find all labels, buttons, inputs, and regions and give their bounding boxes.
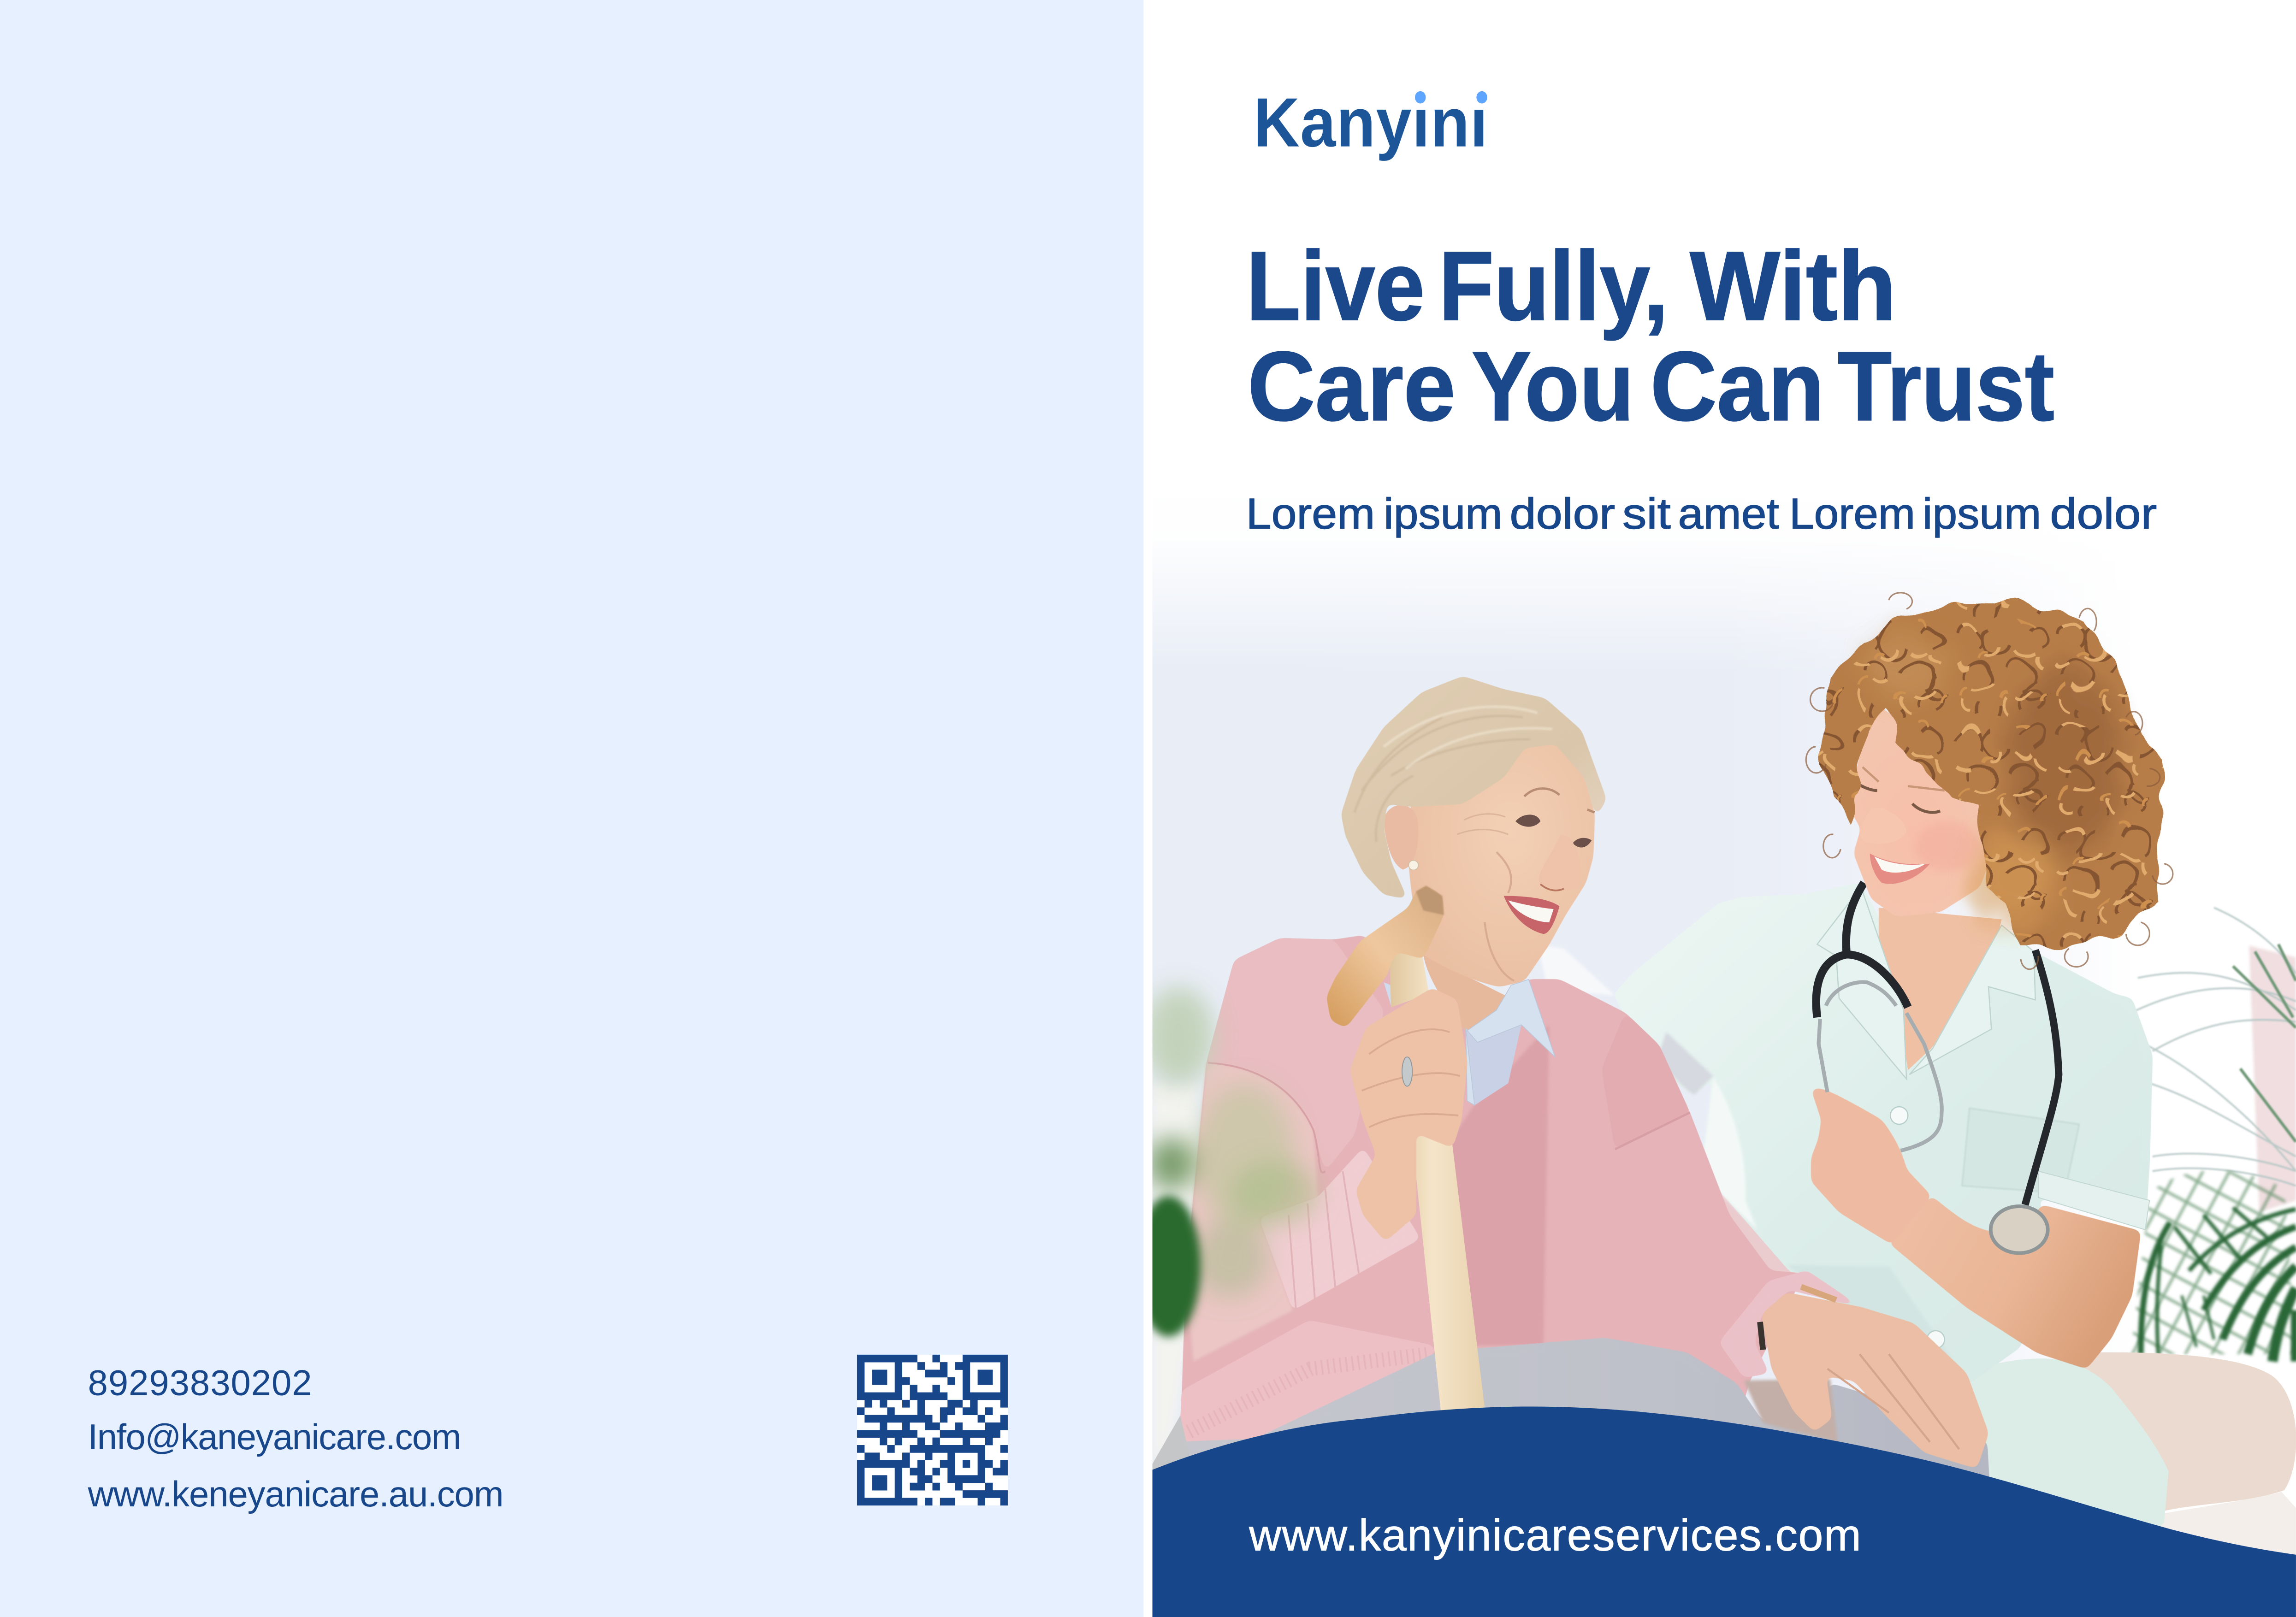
pale top foliage <box>1143 987 1214 1086</box>
heading line 2: Care <box>1248 331 1456 441</box>
photo background wall <box>1153 576 2037 1464</box>
pink shadow beneath sleeve <box>1698 1164 1816 1288</box>
woman face <box>1408 732 1595 987</box>
contact details <box>88 1363 504 1514</box>
black tubing <box>1816 883 1908 1017</box>
nurse face <box>1849 704 1990 916</box>
dark fronds <box>2141 1208 2296 1362</box>
phone number: 89293830202 <box>88 1363 312 1403</box>
woman collar <box>1384 980 1555 1105</box>
nurse uniform <box>1614 883 2153 1383</box>
nurse arm <box>1889 1196 2141 1369</box>
cushion <box>2079 1352 2296 1514</box>
blanket <box>2153 1492 2296 1574</box>
heading line 2 <box>1248 331 2054 441</box>
pocket <box>1962 1108 2079 1193</box>
chest piece <box>1991 1206 2048 1253</box>
subtitle: sit <box>1622 490 1671 538</box>
blurred foreground plant left <box>1136 987 1318 1337</box>
heading line 2: Trust <box>1838 331 2054 441</box>
leafy mesh <box>2130 1170 2296 1354</box>
QR code <box>857 1355 1008 1505</box>
cut end <box>1416 885 1444 915</box>
woman neck <box>1423 955 1508 1042</box>
lower uniform fold <box>1787 1265 1970 1383</box>
heading line 1 <box>1246 231 1896 341</box>
heading line 2: Can <box>1650 331 1824 441</box>
left sleeve <box>1186 1063 1318 1362</box>
palm plant right <box>2130 908 2296 1362</box>
heading line 1: Live <box>1246 231 1425 341</box>
heading line 1: With <box>1690 231 1896 341</box>
nurse eyes, nose and smile <box>1857 767 1980 884</box>
upper sleeve highlight <box>1207 938 1384 1171</box>
dark leaf left <box>1136 1196 1201 1337</box>
body fold <box>1701 1077 1757 1230</box>
woman sweater <box>1178 935 1804 1458</box>
right upper sleeve <box>1602 1013 1690 1149</box>
woman hair <box>1341 676 1606 899</box>
left sofa <box>1153 1083 1196 1464</box>
woman ribbed right cuff <box>1719 1271 1861 1378</box>
left ribbed cuff <box>1259 1148 1420 1310</box>
nurse neck and chest <box>1879 908 2002 1070</box>
subtitle: dolor <box>2050 490 2157 538</box>
finger lines and ring <box>1362 1029 1460 1127</box>
nurse trousers <box>1966 1358 2169 1555</box>
cane shaft <box>1390 951 1485 1411</box>
cane <box>1326 885 1485 1411</box>
main heading <box>1246 231 2054 441</box>
email address: Info@kaneyanicare.com <box>88 1417 461 1457</box>
translucent leaves over sleeve <box>1148 1083 1318 1297</box>
taupe knee shadow <box>1744 1379 1838 1442</box>
heading line 2: You <box>1472 331 1634 441</box>
subtitle <box>1246 490 2157 538</box>
stray curls <box>1806 593 2173 969</box>
pink panel fronds <box>2233 944 2296 1142</box>
woman ear and earring <box>1384 805 1418 870</box>
watch <box>1801 1287 1836 1300</box>
heading line 1: Fully, <box>1438 231 1669 341</box>
website address: www.keneyanicare.au.com <box>88 1475 504 1514</box>
silver tubes <box>1819 982 1942 1151</box>
subtitle: amet <box>1678 490 1779 538</box>
left grey trouser edge <box>1153 1416 1193 1481</box>
panel: front cover background <box>1143 0 2296 1617</box>
sofa and cushion <box>1153 1083 2296 1574</box>
pink wall panel <box>2249 946 2296 1212</box>
subtitle: dolor <box>1509 490 1615 538</box>
banner website text: www.kanyinicareservices.com <box>1249 1510 1861 1560</box>
woman trousers <box>1153 1338 1991 1523</box>
woman smile <box>1504 896 1559 934</box>
ribbed hem <box>1180 1321 1437 1458</box>
distant fronds <box>2130 908 2296 1186</box>
stethoscope <box>1816 883 2059 1253</box>
short sleeve hem <box>2038 1171 2149 1230</box>
woman hand on knee <box>1760 1287 1988 1468</box>
subtitle: Lorem <box>1246 490 1375 538</box>
cane handle <box>1326 885 1444 1027</box>
hair base and tone <box>1823 603 2163 947</box>
uniform buttons <box>1890 1107 1908 1124</box>
photo: senior woman and nurse <box>1153 576 2296 1555</box>
woman gripping hand <box>1350 988 1467 1241</box>
subtitle: Lorem <box>1789 490 1915 538</box>
subtitle: ipsum <box>1384 490 1503 538</box>
logo: Kanyini: Kanyini <box>1254 83 1488 161</box>
nurse collar <box>1817 887 2036 1079</box>
sleeve shadow <box>1657 1032 1713 1095</box>
subtitle: ipsum <box>1923 490 2041 538</box>
seam <box>1208 1063 1325 1173</box>
woman eyes and nose <box>1457 789 1595 981</box>
nurse curly hair <box>1806 593 2173 969</box>
panel: back cover background <box>0 0 1143 1617</box>
wave banner <box>1153 1406 2296 1617</box>
nurse fist <box>1811 1088 1931 1245</box>
knit front panel <box>1450 1025 1549 1346</box>
